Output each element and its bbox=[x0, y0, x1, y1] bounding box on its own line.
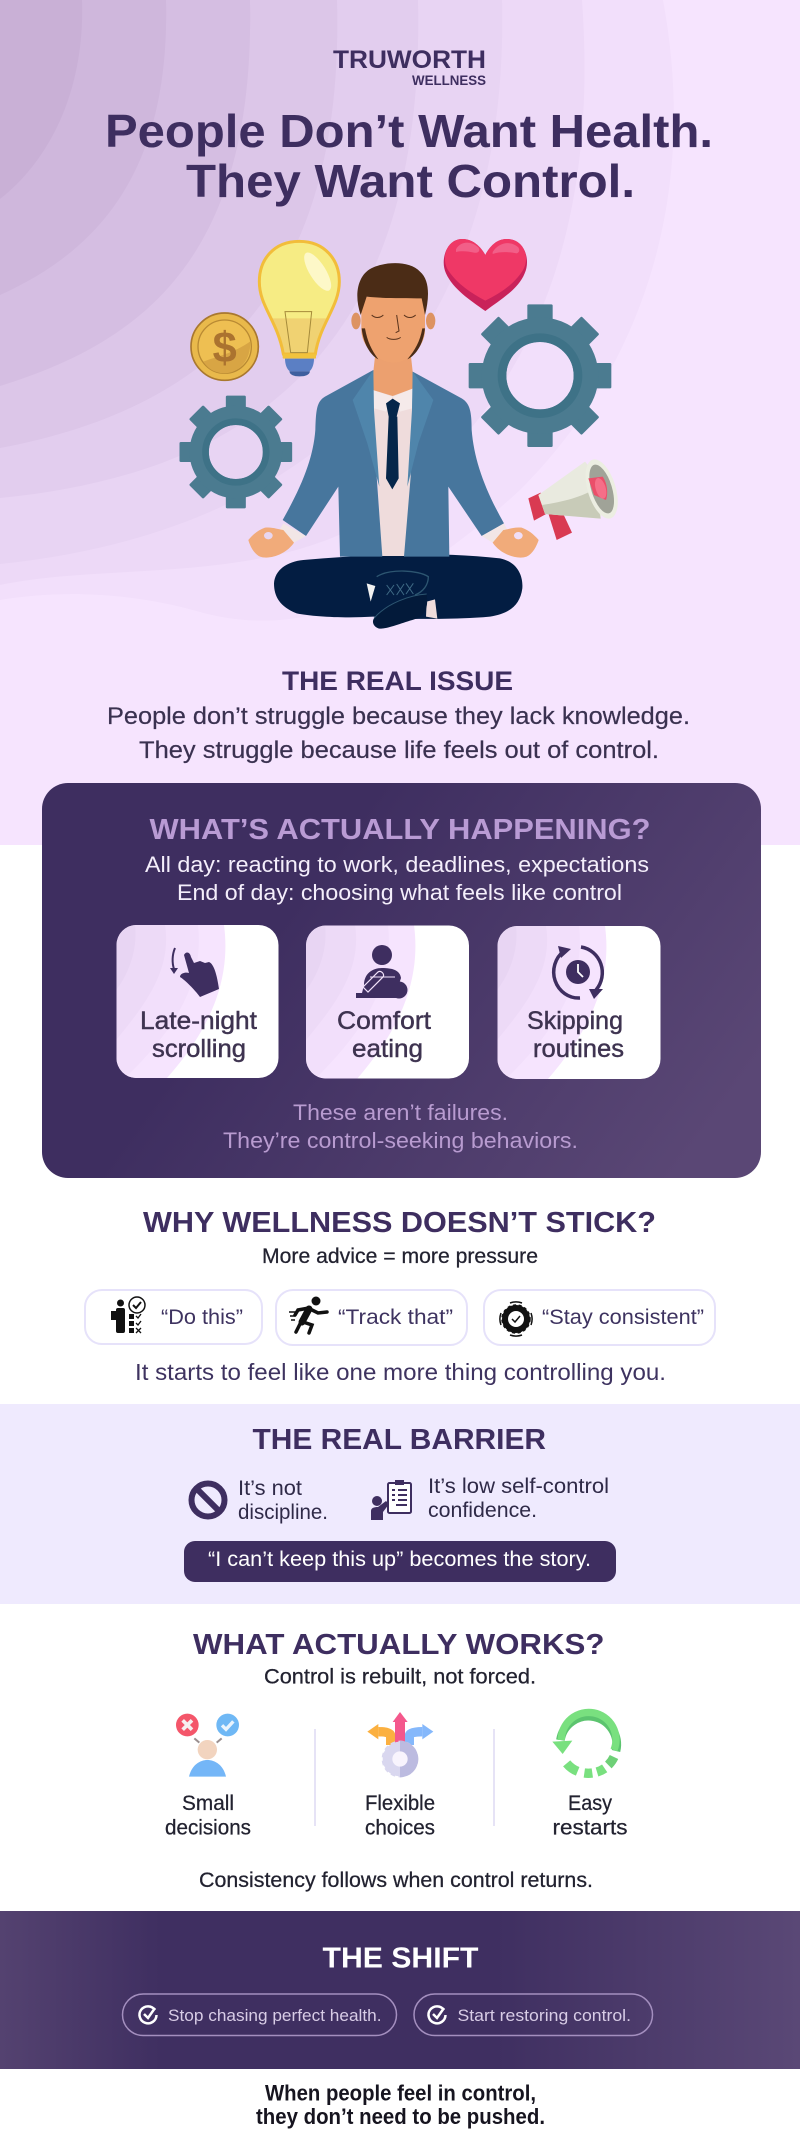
section: the shift: THE SHIFT bbox=[322, 1942, 479, 1974]
closing note: These aren’t failures. bbox=[293, 1100, 508, 1125]
heading: WHAT’S ACTUALLY HAPPENING? bbox=[150, 814, 650, 846]
icon: prohibited sign bbox=[192, 1484, 224, 1516]
label: flexible choices: choices bbox=[365, 1816, 435, 1840]
figure: jacket bbox=[283, 370, 504, 557]
pill: stop chasing: Stop chasing perfect health. bbox=[168, 2006, 382, 2025]
section: the real barrier: THE REAL BARRIER bbox=[252, 1424, 546, 1456]
section: the real issue: THE REAL ISSUE bbox=[282, 666, 513, 696]
closing note bbox=[223, 1100, 578, 1153]
label: small decisions: decisions bbox=[165, 1816, 251, 1840]
closing note: They’re control-seeking behaviors. bbox=[223, 1128, 578, 1153]
pill: do this: “Do this” bbox=[161, 1306, 243, 1329]
card: skipping routines: Skipping bbox=[527, 1007, 623, 1035]
label: easy restarts: restarts bbox=[552, 1816, 628, 1840]
section: why wellness doesn't stick: WHY WELLNESS DOESN’T STICK? bbox=[143, 1207, 656, 1239]
logo: TRUWORTH bbox=[333, 46, 486, 74]
card: comfort eating: Comfort bbox=[337, 1007, 431, 1035]
label: small decisions bbox=[165, 1792, 251, 1840]
icon: check bbox=[429, 2006, 446, 2023]
icon: easy restarts bbox=[552, 1712, 617, 1773]
text: low self-control confidence: confidence. bbox=[428, 1498, 537, 1522]
title bbox=[105, 105, 713, 207]
logo bbox=[333, 46, 486, 88]
section: the shift bbox=[0, 1911, 800, 2069]
callout: story bbox=[184, 1541, 616, 1582]
label: flexible choices bbox=[365, 1792, 435, 1840]
figure: shirt and neck bbox=[373, 353, 413, 556]
closing statement: they don’t need to be pushed. bbox=[256, 2104, 545, 2129]
section: the real issue bbox=[107, 666, 690, 764]
icon: small gear bbox=[179, 396, 292, 508]
figure: tie bbox=[386, 399, 400, 489]
icon: heart bbox=[444, 239, 527, 311]
icon: runner bbox=[289, 1296, 327, 1333]
figure: hands and cuffs bbox=[248, 523, 539, 558]
section: what actually works: Consistency follows when control returns. bbox=[199, 1869, 593, 1892]
closing statement: When people feel in control, bbox=[265, 2080, 536, 2106]
icon: light bulb bbox=[259, 241, 339, 376]
pill: stop chasing bbox=[122, 1994, 396, 2036]
hero background bbox=[0, 0, 800, 845]
card: comfort eating: eating bbox=[352, 1035, 423, 1063]
icon: person with checklist bbox=[111, 1297, 145, 1333]
icon: clock with cycle arrows bbox=[554, 946, 603, 999]
section: the real issue: They struggle because life feels out of control. bbox=[139, 737, 659, 764]
section: the real issue: People don’t struggle because they lack knowledge. bbox=[107, 703, 690, 730]
section: why wellness doesn't stick: It starts to feel like one more thing controlling you. bbox=[135, 1359, 666, 1385]
section: why wellness doesn't stick bbox=[85, 1207, 715, 1385]
card: late-night scrolling: Late-night bbox=[140, 1007, 257, 1035]
section: what actually works bbox=[165, 1629, 628, 1892]
label: flexible choices: Flexible bbox=[365, 1792, 435, 1815]
card: skipping routines: routines bbox=[533, 1035, 624, 1063]
pill: track that bbox=[276, 1290, 467, 1345]
card: skipping routines bbox=[497, 926, 660, 1080]
closing statement bbox=[256, 2080, 545, 2129]
title: People Don’t Want Health. bbox=[105, 105, 713, 157]
label: small decisions: Small bbox=[182, 1792, 234, 1815]
pill: start restoring: Start restoring control. bbox=[458, 2006, 631, 2025]
figure: head bbox=[351, 263, 435, 363]
text: low self-control confidence: It’s low self-control bbox=[428, 1474, 609, 1498]
pill: stay consistent: “Stay consistent” bbox=[542, 1306, 704, 1329]
text block bbox=[145, 852, 649, 905]
icon: comfort eating person bbox=[356, 945, 408, 998]
section: why wellness doesn't stick: More advice = more pressure bbox=[262, 1245, 538, 1268]
card: late-night scrolling bbox=[116, 925, 278, 1078]
icon: coin bbox=[191, 313, 258, 380]
text block: End of day: choosing what feels like control bbox=[177, 880, 622, 905]
icon: person with clipboard bbox=[371, 1480, 411, 1520]
icon: small decisions bbox=[176, 1714, 239, 1777]
label: easy restarts bbox=[552, 1792, 628, 1840]
icon: check bbox=[140, 2006, 156, 2023]
text block: All day: reacting to work, deadlines, expectations bbox=[145, 852, 649, 877]
icon: flexible choices bbox=[367, 1712, 433, 1777]
text: not discipline: discipline. bbox=[238, 1500, 328, 1524]
icon: large gear bbox=[469, 304, 611, 447]
card: comfort eating bbox=[306, 925, 469, 1079]
callout: story: “I can’t keep this up” becomes the story. bbox=[208, 1548, 591, 1571]
icon: megaphone bbox=[528, 456, 624, 540]
icon: gear with check bbox=[500, 1302, 532, 1336]
card: late-night scrolling: scrolling bbox=[152, 1035, 246, 1063]
illustration: meditating businessman with icons bbox=[179, 239, 624, 629]
section: what actually works: Control is rebuilt, not forced. bbox=[264, 1666, 536, 1688]
title: They Want Control. bbox=[186, 155, 635, 207]
text: not discipline: It’s not bbox=[238, 1476, 302, 1500]
icons row bbox=[176, 1712, 617, 1777]
text: not discipline bbox=[238, 1476, 328, 1524]
pill: track that: “Track that” bbox=[338, 1306, 453, 1329]
section: the real barrier bbox=[0, 1404, 800, 1604]
section: what actually works: WHAT ACTUALLY WORKS? bbox=[193, 1629, 604, 1661]
icon: scrolling hand bbox=[170, 948, 219, 997]
pill: stay consistent bbox=[484, 1290, 715, 1345]
panel: what's actually happening bbox=[42, 783, 761, 1178]
label: easy restarts: Easy bbox=[568, 1792, 612, 1815]
figure: legs bbox=[274, 554, 522, 629]
pill: start restoring bbox=[414, 1994, 652, 2036]
pill: do this bbox=[85, 1290, 262, 1344]
logo: WELLNESS bbox=[412, 72, 486, 88]
icon: coin: $ bbox=[213, 324, 237, 372]
text: low self-control confidence bbox=[428, 1474, 609, 1522]
